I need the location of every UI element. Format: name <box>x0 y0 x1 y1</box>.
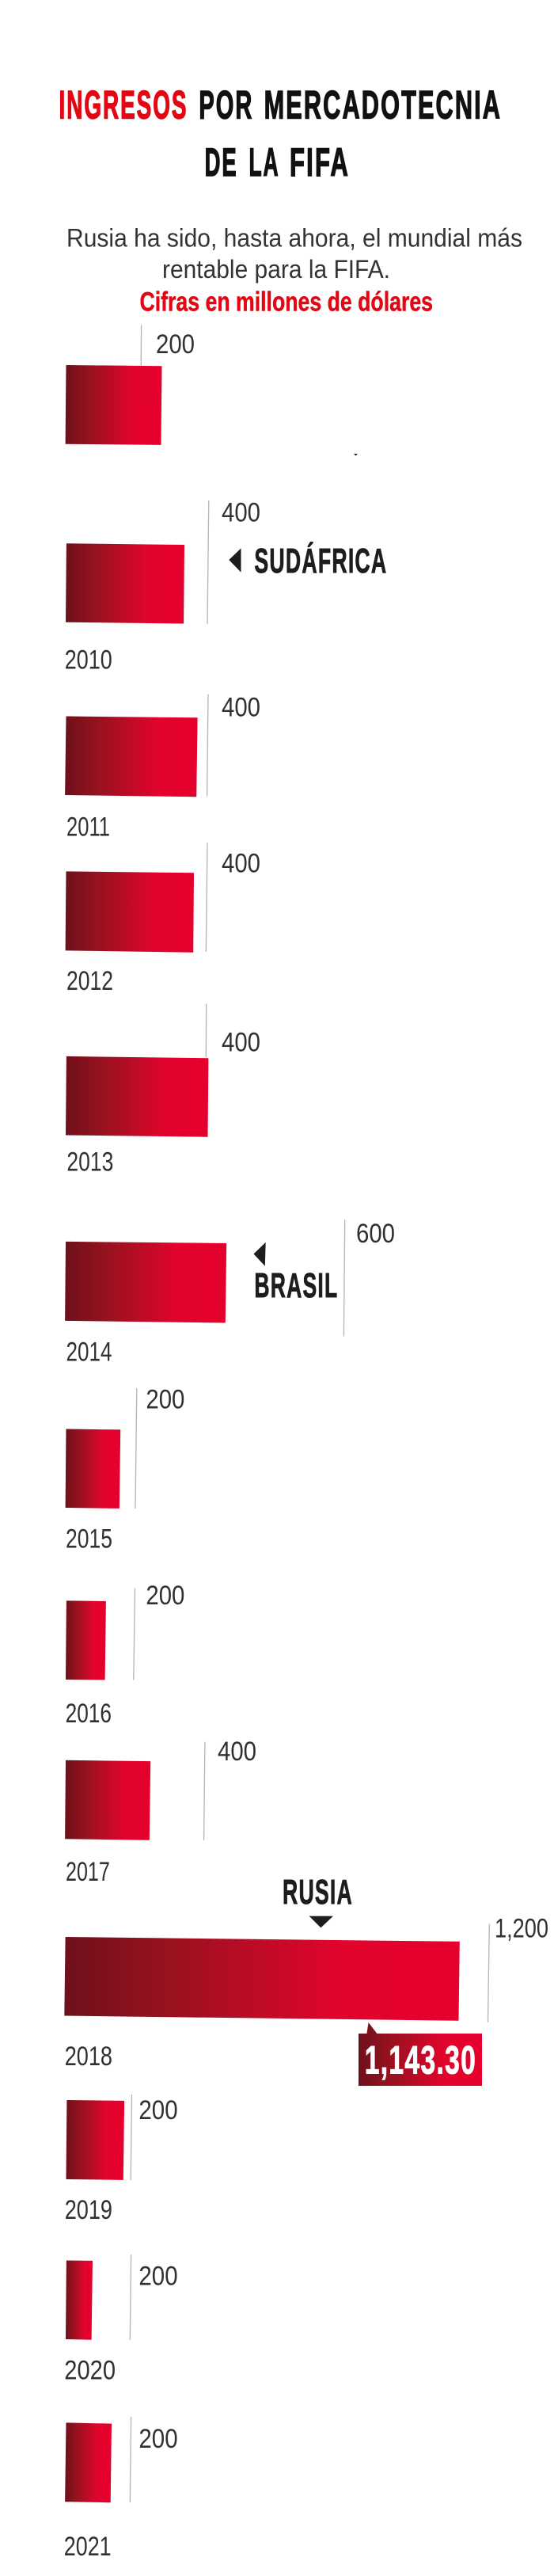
callout: Rusia: RUSIA <box>283 1873 353 1912</box>
bar <box>66 1429 120 1509</box>
row: 2021 <box>64 2417 178 2562</box>
bar <box>65 2422 112 2502</box>
value label: 400 <box>222 692 260 722</box>
title: FIFA <box>290 140 350 185</box>
callout: value 1,143.30: 1,143.30 <box>365 2038 476 2082</box>
bar <box>66 871 194 953</box>
bar <box>66 1056 208 1137</box>
row: 2020 <box>64 2254 178 2385</box>
row: 2016 <box>66 1581 184 1729</box>
row: first bar (no year) <box>66 325 195 445</box>
row: 2014 <box>65 1219 395 1368</box>
bar <box>66 543 184 624</box>
value label: 200 <box>138 2261 178 2291</box>
bar <box>65 1760 150 1840</box>
year: 2021 <box>64 2532 112 2562</box>
year: 2011 <box>66 812 110 842</box>
bar <box>66 365 161 445</box>
year: 2019 <box>65 2195 112 2225</box>
row: 2012 <box>66 843 260 996</box>
value label: 400 <box>222 1028 260 1058</box>
value label: 400 <box>222 848 260 878</box>
year: 2017 <box>66 1857 110 1887</box>
year: 2010 <box>65 645 112 675</box>
year: 2014 <box>66 1337 112 1368</box>
small mark <box>354 454 358 456</box>
value label: 200 <box>146 1385 184 1415</box>
subtitle text: Rusia ha sido, hasta ahora, el mundial más <box>66 224 522 253</box>
unit note: Cifras en millones de dólares <box>139 287 433 317</box>
bar <box>66 2260 93 2340</box>
callout: Brasil <box>253 1242 338 1305</box>
row: 2011 <box>65 692 260 842</box>
value label: 400 <box>222 497 260 527</box>
row: 2013 <box>66 1003 260 1178</box>
callout: value 1,143.30 <box>359 2022 482 2086</box>
bar <box>66 1600 106 1680</box>
row: 2018 <box>64 1913 548 2072</box>
year: 2012 <box>66 966 113 996</box>
title <box>59 82 502 185</box>
title: POR <box>199 82 253 127</box>
subtitle text: rentable para la FIFA. <box>162 255 390 283</box>
value label: 600 <box>356 1219 395 1249</box>
bar <box>64 1937 460 2021</box>
bar <box>65 716 198 797</box>
title: INGRESOS <box>59 82 188 127</box>
year: 2013 <box>66 1147 113 1178</box>
row: 2017 <box>65 1737 256 1887</box>
callout: Sudáfrica: SUDÁFRICA <box>254 541 387 580</box>
value label: 200 <box>138 2095 178 2125</box>
row: 2019 <box>65 2095 178 2225</box>
title: LA <box>249 140 280 185</box>
year: 2016 <box>66 1699 112 1729</box>
value label: 200 <box>156 329 195 360</box>
callout: Rusia <box>283 1873 353 1927</box>
title: DE <box>205 140 238 185</box>
callout: Brasil: BRASIL <box>254 1266 338 1305</box>
bar <box>65 1242 226 1322</box>
subtitle text <box>66 224 522 283</box>
year: 2020 <box>64 2355 116 2385</box>
year: 2015 <box>66 1524 112 1554</box>
row: 2015 <box>66 1385 184 1554</box>
callout: Sudáfrica <box>229 541 387 580</box>
value label: 200 <box>138 2424 178 2454</box>
value label: 200 <box>146 1581 184 1611</box>
year: 2018 <box>65 2041 112 2072</box>
value label: 400 <box>218 1737 256 1767</box>
bar <box>66 2100 124 2180</box>
row: 2010 <box>65 497 260 675</box>
